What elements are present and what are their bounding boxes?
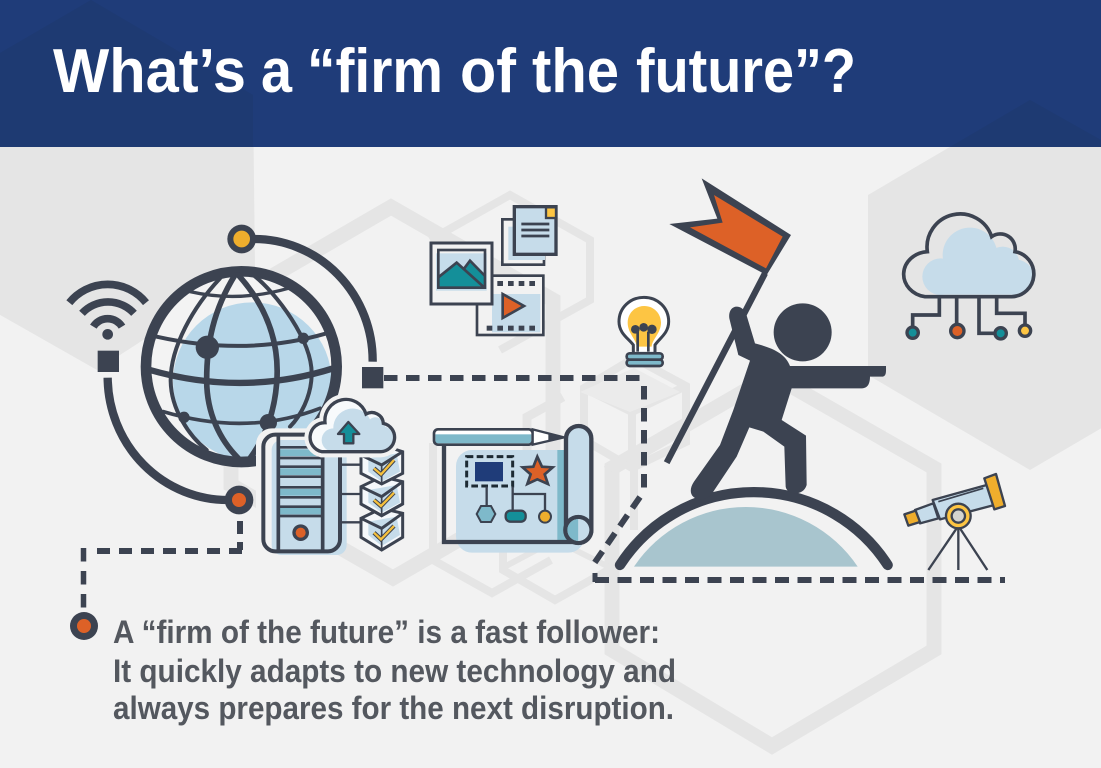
icon: person pointing bbox=[691, 303, 886, 499]
caption text: always prepares for the next disruption. bbox=[113, 690, 674, 726]
title: What’s bbox=[53, 37, 246, 106]
icon: globe bbox=[146, 271, 337, 462]
title: of bbox=[460, 37, 516, 106]
media and light bulb group bbox=[431, 207, 669, 553]
icon: blueprint scroll bbox=[434, 426, 591, 553]
caption bullet bbox=[70, 612, 98, 640]
caption text: It quickly adapts to new technology and bbox=[113, 653, 676, 689]
title: future”? bbox=[636, 37, 856, 106]
icon: checked boxes bbox=[361, 445, 403, 550]
icon: flag bbox=[669, 178, 791, 275]
title: “firm bbox=[307, 37, 443, 106]
connector: dashed line from globe to bulb, figure and telescope bbox=[384, 378, 1005, 582]
icon: documents bbox=[502, 207, 556, 265]
caption text: A “firm of the future” is a fast follower: bbox=[113, 614, 660, 650]
icon: telescope bbox=[904, 474, 1005, 570]
icon: video film bbox=[477, 276, 543, 335]
icon: wifi bbox=[69, 284, 146, 372]
orbit arc bottom bbox=[108, 378, 228, 500]
node: orange dot bbox=[225, 486, 253, 514]
node: yellow dot bbox=[227, 225, 256, 253]
icon: upload cloud bbox=[310, 399, 395, 452]
title: a bbox=[261, 37, 292, 106]
header banner bbox=[0, 0, 1101, 147]
icon: server with cloud and checked boxes bbox=[256, 399, 403, 557]
icon: hill bbox=[620, 492, 888, 567]
figure, cloud network and telescope group bbox=[620, 178, 1005, 570]
icon: photo bbox=[431, 243, 492, 304]
caption text bbox=[113, 614, 676, 726]
icon: light bulb bbox=[619, 297, 669, 366]
pencil bbox=[434, 429, 565, 445]
globe and orbit group bbox=[69, 225, 403, 557]
title: the bbox=[532, 37, 619, 106]
node: square right bbox=[362, 367, 383, 388]
orbit arc top bbox=[253, 239, 373, 362]
icon: flag pole bbox=[667, 273, 765, 463]
connector: dashed line from globe to caption bbox=[84, 521, 242, 608]
icon: cloud network bbox=[904, 214, 1034, 339]
